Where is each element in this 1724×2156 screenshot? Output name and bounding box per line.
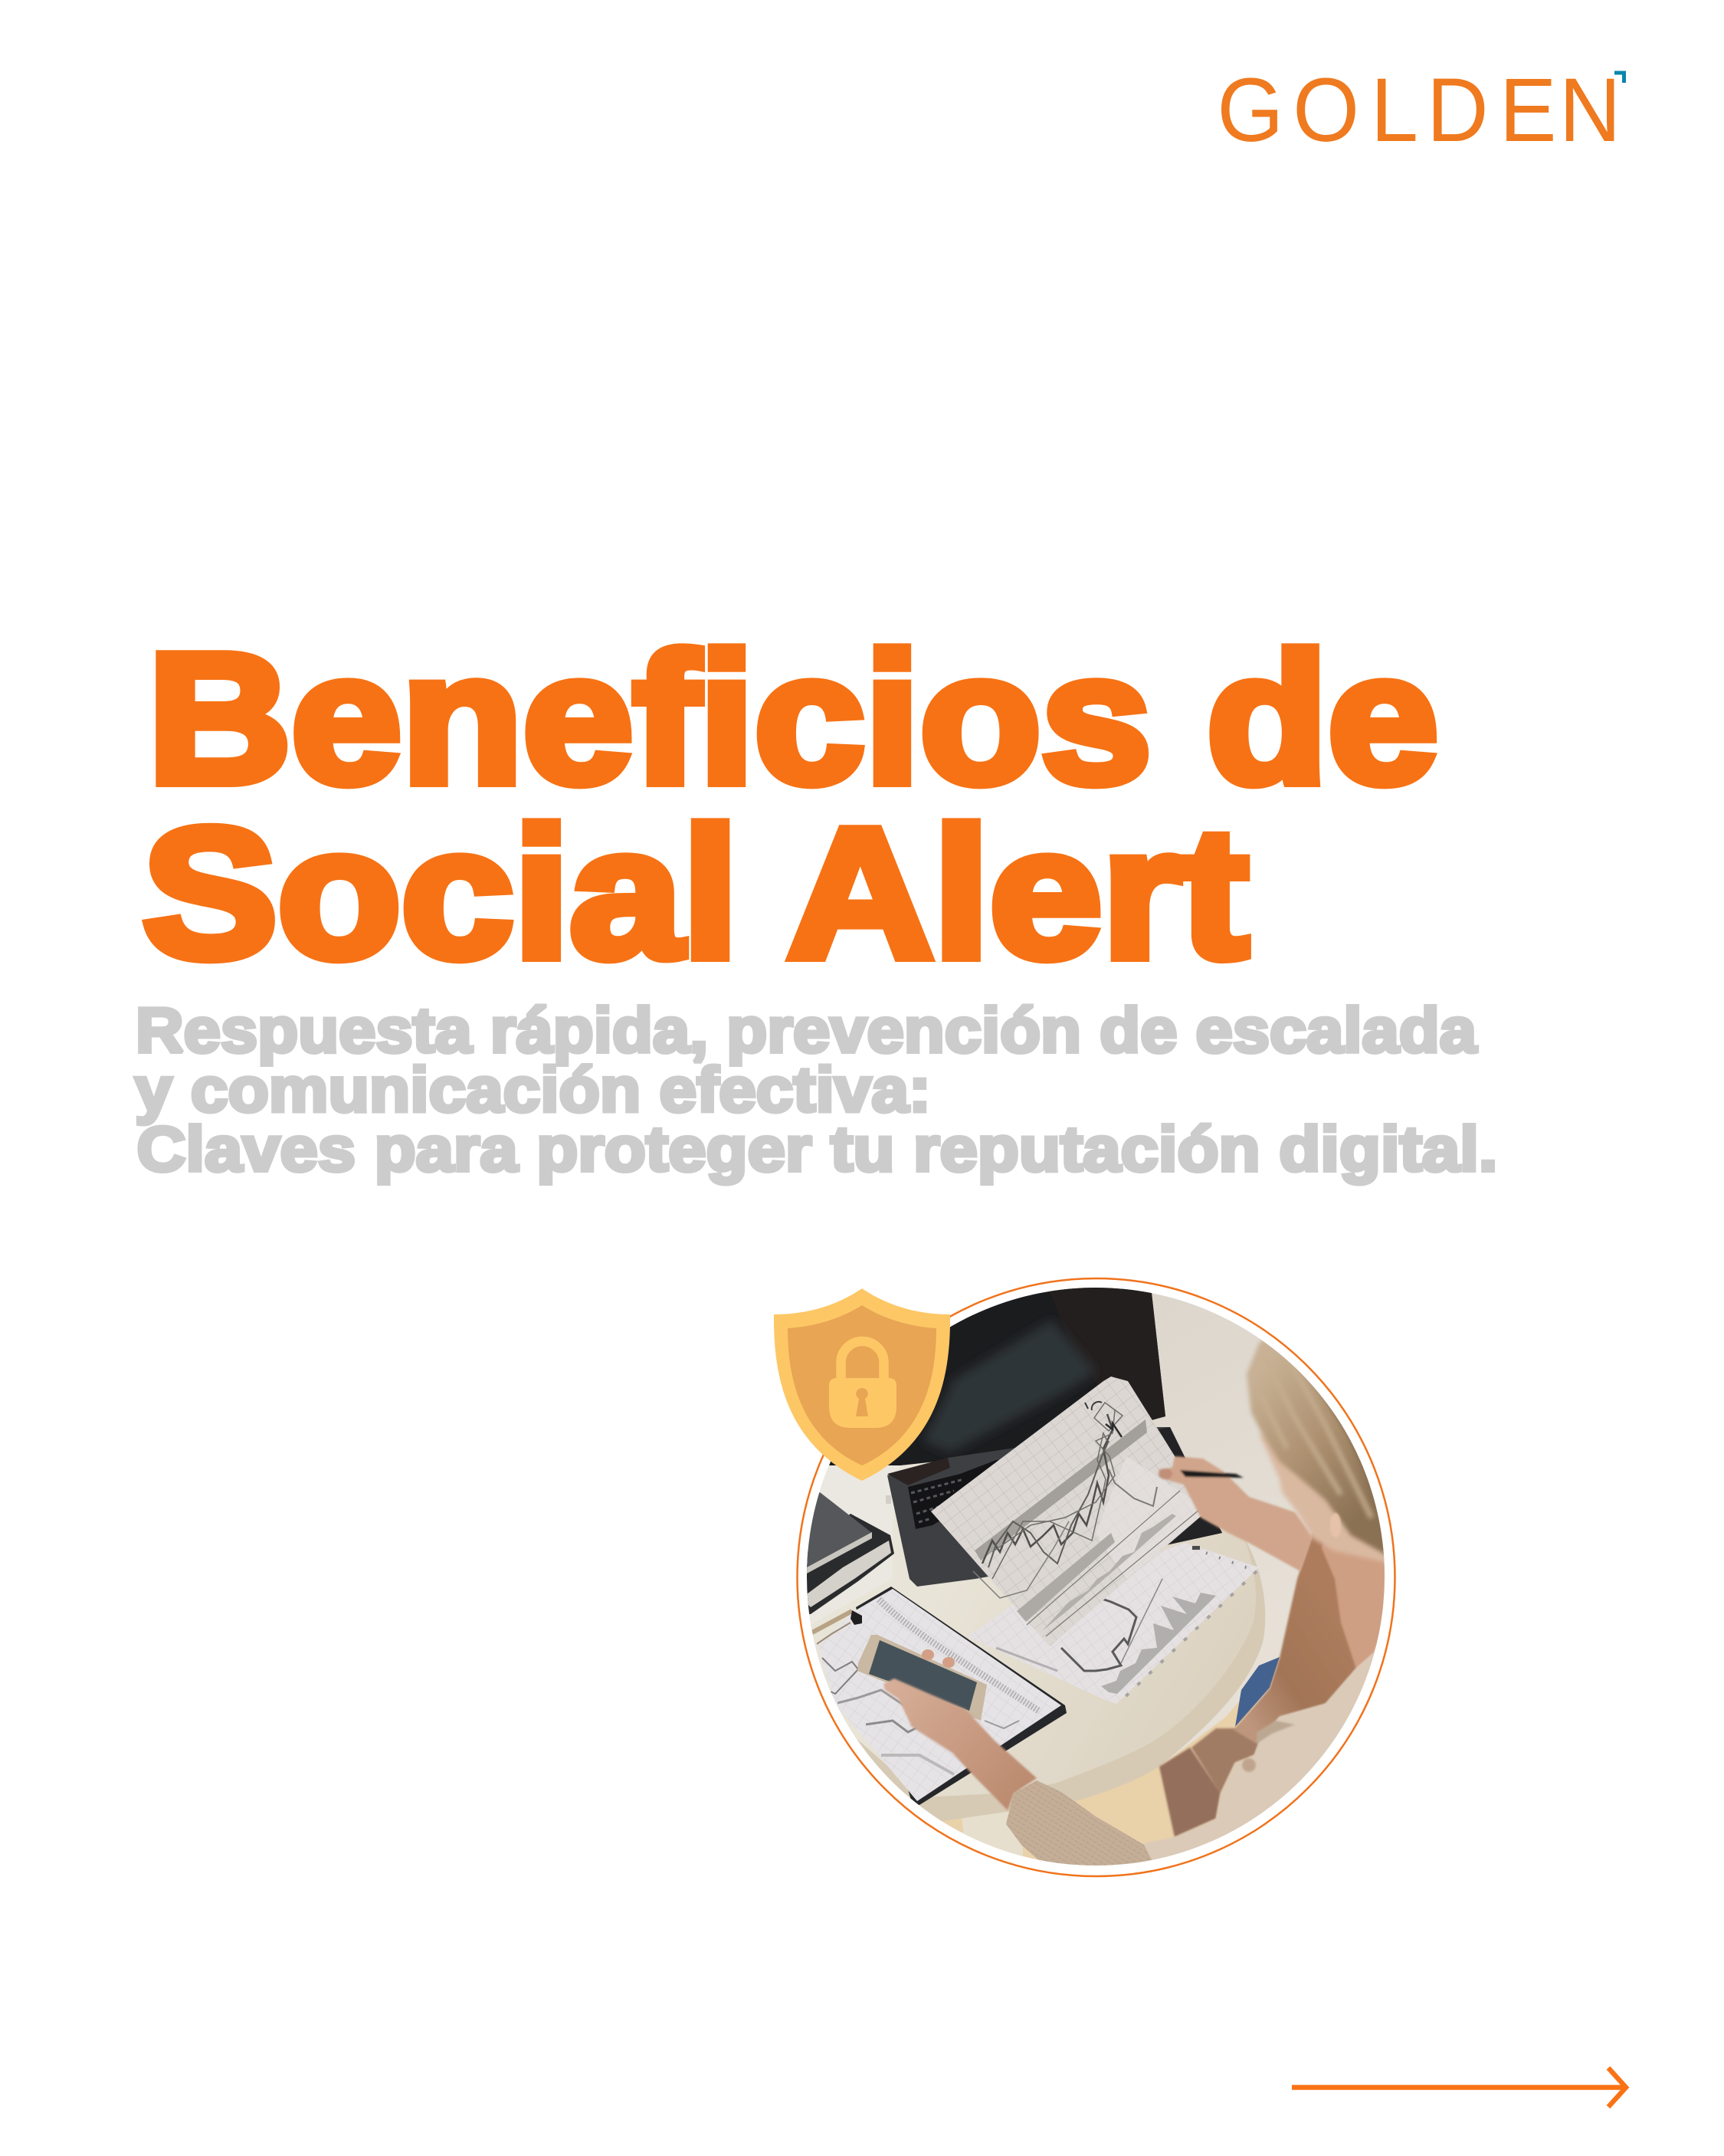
clipboard with chart sheet xyxy=(812,1587,1067,1805)
sweater xyxy=(1126,1610,1402,1870)
ear xyxy=(1330,1513,1341,1537)
jeans xyxy=(1235,1657,1280,1727)
wall xyxy=(857,1291,1385,1859)
shield outer xyxy=(774,1288,950,1481)
table xyxy=(797,1460,1265,1821)
arrow xyxy=(1292,2068,1626,2107)
seated leg and foot xyxy=(1159,1728,1260,1837)
subtitle line 3: Claves para proteger tu reputación digital. xyxy=(136,1113,1498,1185)
logo: GOLDEN: GOLDEN xyxy=(1217,60,1621,161)
left hand and forearm xyxy=(883,1679,1037,1810)
woman's arm and shoulder xyxy=(1234,1525,1391,1744)
main chart sheet xyxy=(931,1377,1208,1646)
keyboard keys xyxy=(911,1479,964,1522)
clipboard clip xyxy=(812,1611,852,1633)
price line xyxy=(1061,1598,1136,1671)
chart bands xyxy=(975,1419,1147,1560)
illustration: woman reviewing charts at a table xyxy=(797,1272,1402,1878)
chart box and arrow xyxy=(1094,1403,1123,1431)
clipboard chart lines xyxy=(822,1658,858,1694)
table pedestal xyxy=(962,1812,1023,1856)
laptop port xyxy=(886,1495,891,1504)
ruler ticks xyxy=(1193,1550,1247,1569)
face xyxy=(1259,1433,1391,1564)
chart price lines xyxy=(982,1414,1113,1564)
hair xyxy=(1247,1303,1391,1557)
volume area chart xyxy=(1101,1593,1216,1694)
clipboard volume band xyxy=(879,1600,1040,1711)
phone xyxy=(857,1635,987,1721)
subtitle line 1: Respuesta rápida, prevención de escalada xyxy=(136,995,1477,1065)
shield inner xyxy=(788,1305,936,1465)
circular ring around photo xyxy=(797,1278,1395,1876)
fingers behind phone xyxy=(922,1649,955,1668)
second chart sheet xyxy=(968,1543,1259,1704)
notebooks xyxy=(807,1492,894,1614)
logo blue corner mark xyxy=(1614,73,1624,83)
lower mountain chart xyxy=(1042,1514,1176,1631)
laptop base xyxy=(886,1427,1222,1587)
title xyxy=(143,616,1438,996)
subtitle line 2: y comunicación efectiva: xyxy=(135,1054,931,1125)
sleeve xyxy=(1006,1780,1157,1870)
subtitle xyxy=(135,995,1498,1185)
laptop screen xyxy=(829,1288,1165,1465)
title line 1: Beneficios de xyxy=(148,616,1438,822)
title line 2: Social Alert xyxy=(143,791,1248,996)
right hand holding pen xyxy=(1159,1456,1313,1571)
shield with padlock icon xyxy=(774,1288,950,1481)
floor xyxy=(923,1702,1255,1866)
padlock xyxy=(829,1341,896,1428)
